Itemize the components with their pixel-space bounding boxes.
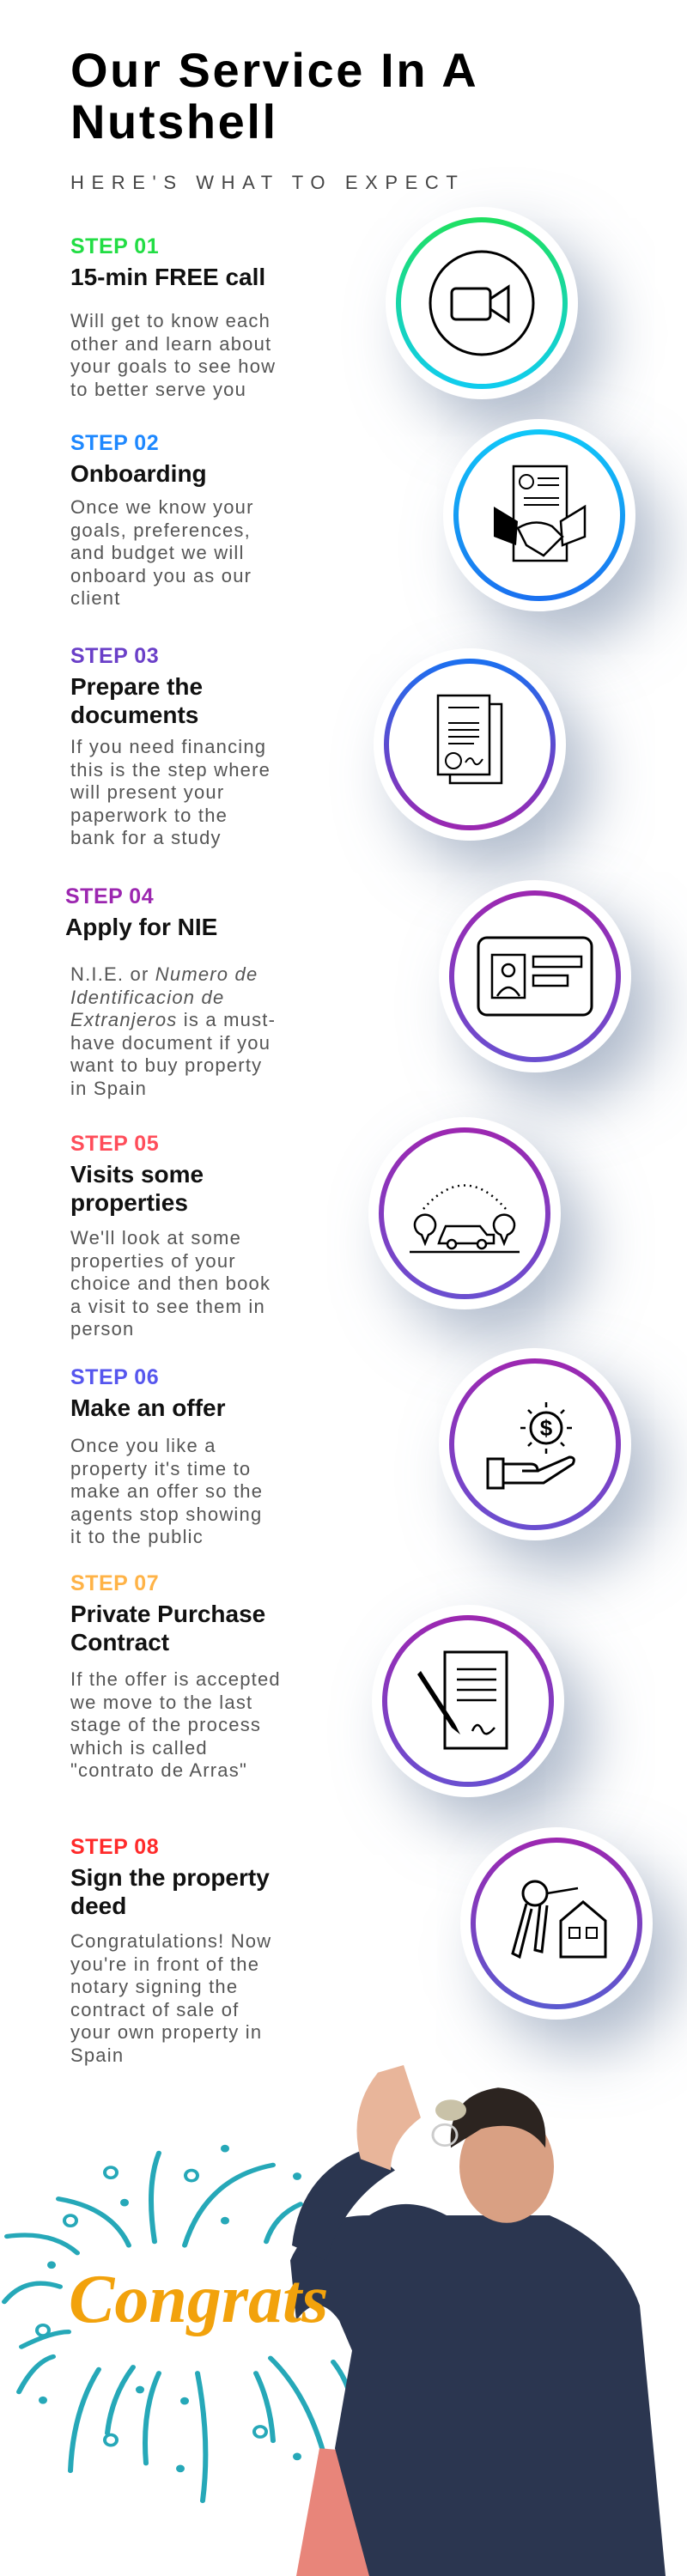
icon circle 05: car and map pins — [368, 1117, 561, 1309]
step 06 text: property it's time to — [70, 1458, 251, 1479]
step 06 text: Once you like a — [70, 1435, 216, 1456]
step 07 text: we move to the last — [70, 1692, 252, 1712]
step 07 text — [70, 1571, 281, 1781]
step 03 text: STEP 03 — [70, 644, 159, 668]
icon circle 06: hand with dollar — [439, 1348, 631, 1540]
step 02 text: onboard you as our — [70, 565, 252, 586]
step 06 text: it to the public — [70, 1526, 204, 1547]
step 02 text: client — [70, 587, 121, 609]
step 07 text: "contrato de Arras" — [70, 1759, 247, 1781]
step 03 text: paperwork to the — [70, 804, 228, 826]
step 02 text: Once we know your — [70, 496, 254, 518]
step 06 text: Make an offer — [70, 1394, 225, 1421]
step 02 text: goals, preferences, — [70, 519, 251, 541]
step 04 text: in Spain — [70, 1077, 147, 1099]
step 01 text: other and learn about — [70, 333, 271, 354]
step 05 text — [70, 1132, 271, 1340]
step 05 text: Visits some — [70, 1161, 204, 1188]
step 04 text: Extranjeros is a must- — [70, 1009, 276, 1030]
step 01 text: 15-min FREE call — [70, 264, 265, 290]
step 05 text: a visit to see them in — [70, 1295, 265, 1317]
step 04 text: have document if you — [70, 1032, 271, 1053]
step 08 text: your own property in — [70, 2021, 262, 2043]
step 06 text — [70, 1365, 263, 1547]
person holding keys — [290, 2065, 666, 2576]
icon circle 02: handshake contract — [443, 419, 635, 611]
step 08 text: contract of sale of — [70, 1999, 239, 2020]
step 08 text: Congratulations! Now — [70, 1930, 271, 1952]
step 01 text: STEP 01 — [70, 234, 159, 258]
icon circle 01: video call — [386, 207, 578, 399]
step 05 text: properties of your — [70, 1250, 236, 1271]
step 08 text: deed — [70, 1893, 126, 1919]
step 01 text: your goals to see how — [70, 355, 276, 377]
step 08 text: you're in front of the — [70, 1953, 259, 1975]
step 07 text: Private Purchase — [70, 1601, 265, 1627]
step 03 text: this is the step where — [70, 759, 271, 780]
step 02 text — [70, 431, 254, 609]
step 03 text: will present your — [70, 781, 224, 803]
step 08 text: Sign the property — [70, 1864, 270, 1891]
congrats text: Congrats — [69, 2262, 328, 2337]
step 03 text: documents — [70, 702, 198, 728]
icon circle 07: contract with pen — [372, 1605, 564, 1797]
step 08 text — [70, 1835, 271, 2066]
step 02 text: STEP 02 — [70, 431, 159, 455]
step 07 text: which is called — [70, 1736, 208, 1759]
step 04 text: STEP 04 — [65, 884, 154, 908]
step 04 text: want to buy property — [70, 1054, 262, 1076]
step 07 text: STEP 07 — [70, 1571, 159, 1595]
step 07 text: Contract — [70, 1629, 169, 1656]
title: Our Service In A — [70, 43, 478, 97]
step 03 text: bank for a study — [70, 827, 222, 848]
step 06 text: STEP 06 — [70, 1365, 159, 1389]
step 08 text: Spain — [70, 2044, 124, 2066]
step 07 text: If the offer is accepted — [70, 1668, 281, 1690]
step 03 text: Prepare the — [70, 673, 203, 700]
step 03 text — [70, 644, 271, 848]
step 08 text: notary signing the — [70, 1976, 238, 1997]
subtitle: HERE'S WHAT TO EXPECT — [70, 172, 465, 193]
congrats fireworks illustration — [2, 2145, 347, 2504]
title: Nutshell — [70, 94, 278, 149]
step 02 text: Onboarding — [70, 460, 207, 487]
step 04 text: Identificacion de — [70, 986, 224, 1008]
step 01 text: Will get to know each — [70, 310, 271, 331]
title — [70, 43, 478, 149]
step 05 text: choice and then book — [70, 1273, 271, 1294]
icon circle 06: hand with dollar: $ — [540, 1415, 553, 1441]
step 03 text: If you need financing — [70, 736, 266, 757]
icon circle 08: keys and house — [460, 1827, 653, 2020]
step 05 text: person — [70, 1318, 134, 1340]
step 08 text: STEP 08 — [70, 1835, 159, 1859]
step 02 text: and budget we will — [70, 542, 245, 563]
step 04 text: N.I.E. or Numero de — [70, 963, 258, 985]
step 05 text: properties — [70, 1189, 188, 1216]
step 01 text — [70, 234, 276, 400]
icon circle 03: documents — [374, 648, 566, 841]
step 04 text — [65, 884, 276, 1099]
step 01 text: to better serve you — [70, 378, 246, 400]
step 06 text: make an offer so the — [70, 1480, 263, 1502]
icon circle 04: ID card — [439, 880, 631, 1072]
step 07 text: stage of the process — [70, 1714, 261, 1735]
step 05 text: STEP 05 — [70, 1132, 159, 1156]
step 06 text: agents stop showing — [70, 1503, 262, 1525]
step 05 text: We'll look at some — [70, 1227, 241, 1249]
step 04 text: Apply for NIE — [65, 914, 217, 940]
